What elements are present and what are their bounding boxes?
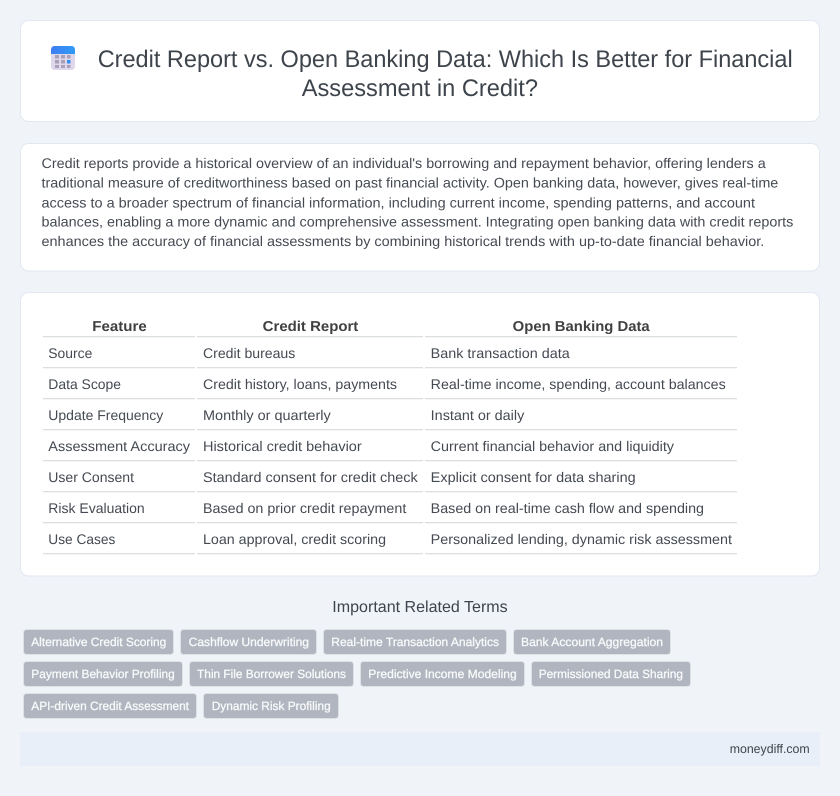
tag list: related terms	[24, 630, 690, 718]
title: Credit Report vs. Open Banking Data: Which Is Better for Financial	[98, 46, 793, 73]
row: assessment accuracy	[48, 438, 674, 454]
table header row: Credit Report	[263, 319, 359, 335]
row: update frequency: Update Frequency	[48, 407, 163, 423]
tag: Permissioned Data Sharing	[539, 667, 683, 681]
text block: introduction paragraph	[42, 155, 793, 249]
tag	[360, 662, 524, 686]
row: risk evaluation: Risk Evaluation	[48, 500, 145, 516]
text block: introduction paragraph: Credit reports provide a historical overview of an individual's borrowing and repayment behavior, offering lenders a	[42, 155, 766, 171]
row: use cases: Personalized lending, dynamic risk assessment	[431, 531, 732, 547]
row: source: Source	[48, 345, 93, 361]
text block: introduction paragraph: traditional measure of creditworthiness based on past financial activity. Open banking data, however, gives real-time	[42, 174, 779, 190]
heading: important related terms: Important Related Terms	[332, 599, 508, 616]
row: data scope: Data Scope	[48, 376, 121, 392]
row: data scope: Real-time income, spending, account balances	[431, 376, 726, 392]
row: use cases: Loan approval, credit scoring	[203, 531, 386, 547]
panel: introduction	[20, 144, 820, 271]
tag: Dynamic Risk Profiling	[212, 699, 331, 713]
row: assessment accuracy: Current financial behavior and liquidity	[431, 438, 674, 454]
tag	[24, 694, 196, 718]
row: update frequency: Instant or daily	[431, 407, 524, 423]
row: user consent	[48, 469, 636, 485]
tag: Alternative Credit Scoring	[31, 635, 166, 649]
title	[98, 46, 793, 102]
tag	[180, 630, 316, 654]
tag: Thin File Borrower Solutions	[197, 667, 346, 681]
row: source	[48, 345, 570, 361]
table header row: Feature	[92, 319, 147, 335]
tag	[24, 630, 174, 654]
title: Assessment in Credit?	[302, 75, 538, 102]
icon: calendar	[51, 46, 75, 70]
text block: introduction paragraph: enhances the accuracy of financial assessments by combining historical trends with up-to-date financial behavior.	[42, 233, 764, 249]
tag: Cashflow Underwriting	[189, 635, 309, 649]
row: data scope: Credit history, loans, payments	[203, 376, 397, 392]
footer	[20, 732, 820, 766]
row: risk evaluation: Based on real-time cash flow and spending	[431, 500, 704, 516]
row: user consent: Explicit consent for data sharing	[431, 469, 636, 485]
row: user consent: Standard consent for credit check	[203, 469, 419, 485]
table header row	[92, 319, 651, 335]
row: update frequency	[48, 407, 524, 423]
tag	[532, 662, 690, 686]
tag	[324, 630, 506, 654]
row: source: Credit bureaus	[203, 345, 295, 361]
footer: moneydiff.com	[730, 742, 810, 756]
tag: API-driven Credit Assessment	[31, 699, 190, 713]
table header row: Open Banking Data	[513, 319, 651, 335]
row: use cases	[48, 531, 732, 547]
tag: Payment Behavior Profiling	[31, 667, 175, 681]
row: assessment accuracy: Assessment Accuracy	[48, 438, 190, 454]
panel: header	[20, 20, 820, 122]
tag: Real-time Transaction Analytics	[331, 635, 499, 649]
row: assessment accuracy: Historical credit behavior	[203, 438, 362, 454]
tag: Predictive Income Modeling	[368, 667, 517, 681]
text block: introduction paragraph: access to a broader spectrum of financial information, including current income, spending patterns, and account	[42, 194, 755, 210]
row: source: Bank transaction data	[431, 345, 570, 361]
row: risk evaluation	[48, 500, 704, 516]
panel: comparison table	[20, 292, 820, 576]
tag	[514, 630, 670, 654]
tag	[190, 662, 354, 686]
row: risk evaluation: Based on prior credit repayment	[203, 500, 406, 516]
row: data scope	[48, 376, 726, 392]
tag	[204, 694, 338, 718]
row: use cases: Use Cases	[48, 531, 115, 547]
row: user consent: User Consent	[48, 469, 134, 485]
tag: Bank Account Aggregation	[521, 635, 663, 649]
tag	[24, 662, 182, 686]
row: update frequency: Monthly or quarterly	[203, 407, 331, 423]
text block: introduction paragraph: balances, enabling a more dynamic and comprehensive assessment. Integrating open banking data with credit reports	[42, 214, 793, 230]
